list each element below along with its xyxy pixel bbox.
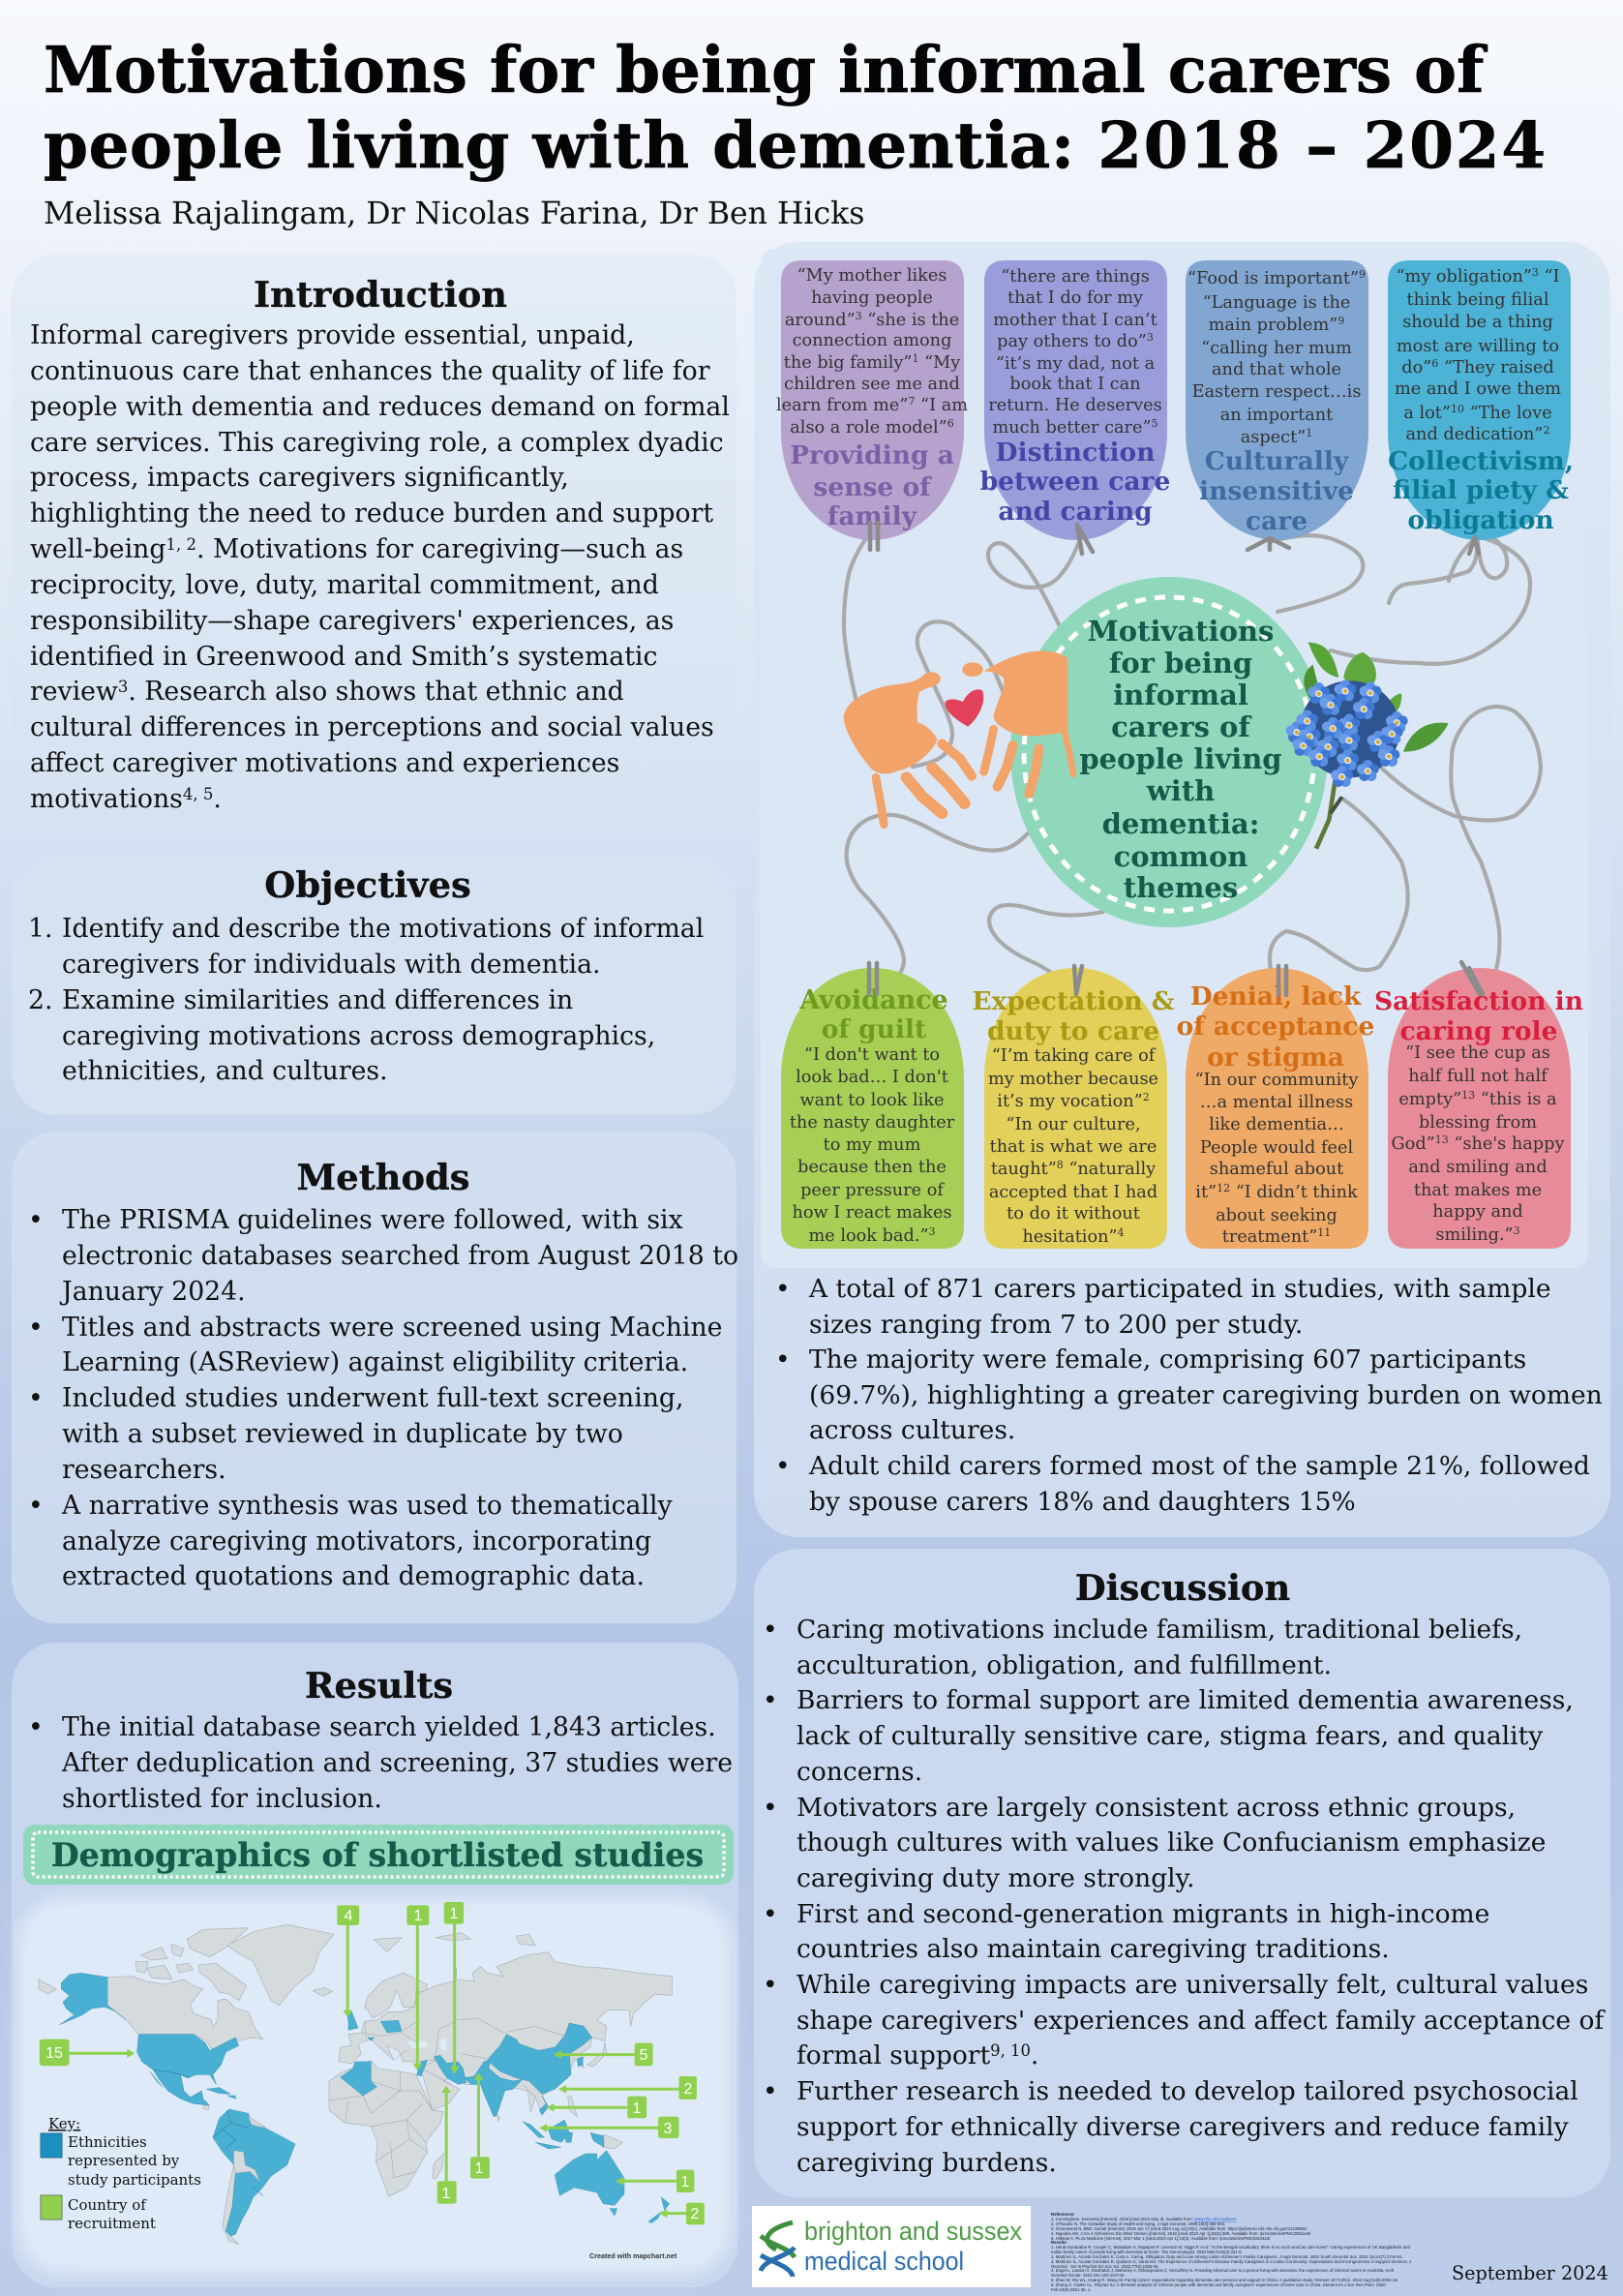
tag: denial, lack of acceptance or stigma: 12 bbox=[1217, 1182, 1230, 1194]
list: participant results bbox=[775, 1274, 1603, 1517]
tag: denial, lack of acceptance or stigma: about seeking bbox=[1216, 1206, 1337, 1225]
europe, africa, asia and oceania bbox=[329, 1933, 672, 2223]
list: methods: Titles and abstracts were screened using Machine bbox=[62, 1313, 722, 1343]
references: 2. Martinez IL, Acosta Gonzalez E, Cara A. Caring, Obligation, Duty and Love Among Latino Alzheimer's Family Caregivers. J Appl Gerontol. 2022 South Gerontol Soc. 2022 Jul;41(7):1744-51. bbox=[1051, 2254, 1403, 2259]
references: Indian family carers of people living with dementia at home. The Gerontologist. 2020 March;60(2):331-9. bbox=[1051, 2250, 1243, 2254]
panel: objectives bbox=[12, 857, 736, 1115]
tag: collectivism, filial piety and obligation: think being filial bbox=[1407, 290, 1549, 310]
list: objectives: 1. bbox=[28, 914, 52, 944]
list: objectives bbox=[28, 914, 704, 1086]
tag: avoidance of guilt: how I react makes bbox=[792, 1203, 952, 1223]
text: introduction: care services. This caregiving role, a complex dyadic bbox=[30, 428, 724, 458]
tag: collectivism, filial piety and obligation: obligation bbox=[1407, 505, 1554, 535]
panel: discussion bbox=[754, 1549, 1610, 2197]
text: introduction: Informal caregivers provide essential, unpaid, bbox=[30, 320, 635, 350]
list: discussion: acculturation, obligation, and fulfillment. bbox=[796, 1650, 1332, 1680]
tag: satisfaction in caring role: that makes me bbox=[1414, 1181, 1542, 1200]
heading: discussion: Discussion bbox=[1075, 1566, 1290, 1609]
references: 5. Hillman A. PLoS Medicine [Internet]. 2017 Mar 1 [cited 2022 Apr 1];14(3). Available from: /pmc/articles/PMC5319116/ bbox=[1051, 2236, 1271, 2241]
list: discussion: • bbox=[763, 1899, 778, 1929]
list: methods bbox=[28, 1205, 738, 1591]
tag: denial, lack of acceptance or stigma: shameful about bbox=[1210, 1160, 1343, 1179]
tag: providing a sense of family: family bbox=[827, 501, 918, 531]
central circle: motivations: carers of bbox=[1111, 710, 1252, 743]
list: results bbox=[28, 1712, 733, 1814]
tag: satisfaction in caring role bbox=[1374, 968, 1583, 1249]
list: discussion: Motivators are largely consistent across ethnic groups, bbox=[796, 1793, 1516, 1823]
text: introduction: affect caregiver motivations and experiences bbox=[30, 748, 619, 778]
references: 1. Cunningham. Dementia [Internet]. 2019 [cited 2021 May 3]. Available from: www.nhs.uk/conditions bbox=[1051, 2217, 1236, 2221]
americas bbox=[39, 1924, 334, 2244]
tag: collectivism, filial piety and obligation: “The love bbox=[1464, 404, 1552, 423]
central circle: motivations bbox=[1010, 577, 1328, 927]
list: methods: • bbox=[28, 1383, 44, 1413]
text: introduction: reciprocity, love, duty, marital commitment, and bbox=[30, 570, 659, 600]
tag: collectivism, filial piety and obligation: “my obligation” bbox=[1396, 267, 1532, 287]
tag: distinction between care and caring: that I do for my bbox=[1007, 288, 1143, 308]
tag: expectation and duty to care: hesitation” bbox=[1022, 1227, 1118, 1247]
tag: denial, lack of acceptance or stigma: “I didn’t think bbox=[1230, 1183, 1358, 1202]
tag: distinction between care and caring: and caring bbox=[998, 497, 1153, 527]
tag: satisfaction in caring role: caring role bbox=[1400, 1016, 1557, 1046]
list: participant results: Adult child carers formed most of the sample 21%, followed bbox=[809, 1451, 1590, 1481]
count labels: 1 bbox=[450, 1906, 459, 1922]
map key bbox=[41, 2115, 201, 2232]
text: introduction: motivations4, 5. bbox=[30, 784, 222, 814]
tag: expectation and duty to care: taught” bbox=[991, 1160, 1057, 1179]
tag: satisfaction in caring role: Satisfaction in bbox=[1374, 986, 1583, 1016]
icon: forget-me-not flowers bbox=[1286, 642, 1449, 849]
list: discussion bbox=[763, 1615, 1606, 2178]
tag: satisfaction in caring role: “this is a bbox=[1475, 1090, 1557, 1109]
tag: expectation and duty to care: my mother because bbox=[988, 1070, 1158, 1089]
tag: expectation and duty to care: 4 bbox=[1118, 1226, 1125, 1239]
tag: providing a sense of family: 3 bbox=[856, 310, 862, 322]
references: 4. Engel L, Lawton A, Dowhaluk J, Mahoney A, Mihalopoulos C, McCaffrey N. Providing informal care to a person living with dementia: the experiences of informal carers in Australia. Arch bbox=[1051, 2268, 1395, 2273]
central circle: motivations: with bbox=[1146, 774, 1215, 807]
tag: culturally insensitive care: 9 bbox=[1337, 315, 1344, 327]
list: discussion: Barriers to formal support are limited dementia awareness, bbox=[796, 1685, 1574, 1715]
tag: avoidance of guilt: peer pressure of bbox=[800, 1181, 945, 1200]
connecting strings bbox=[844, 528, 1541, 994]
tag: denial, lack of acceptance or stigma: like dementia… bbox=[1209, 1115, 1344, 1134]
authors: Melissa Rajalingam, Dr Nicolas Farina, Dr Ben Hicks bbox=[44, 196, 864, 231]
references: Feb;19(8):2821-35. 1. bbox=[1051, 2287, 1092, 2292]
list: participant results: (69.7%), highlighting a greater caregiving burden on women bbox=[809, 1380, 1603, 1410]
list: results: shortlisted for inclusion. bbox=[62, 1784, 382, 1814]
references: Results: bbox=[1051, 2240, 1068, 2245]
count labels: 1 bbox=[442, 2186, 451, 2202]
tag: distinction between care and caring: pay others to do” bbox=[997, 332, 1147, 351]
tag: expectation and duty to care: 2 bbox=[1143, 1091, 1150, 1103]
list: participant results: by spouse carers 18% and daughters 15% bbox=[809, 1487, 1356, 1517]
text: introduction: continuous care that enhances the quality of life for bbox=[30, 356, 709, 386]
tag: collectivism, filial piety and obligation: most are willing to bbox=[1397, 337, 1559, 356]
title: Motivations for being informal carers of bbox=[44, 32, 1484, 107]
count boxes bbox=[40, 1902, 705, 2224]
list: methods: analyze caregiving motivators, incorporating bbox=[62, 1526, 651, 1556]
map credit: Created with mapchart.net bbox=[589, 2251, 677, 2260]
list: objectives: caregiving motivations across demographics, bbox=[62, 1021, 655, 1051]
diagram: common themes bbox=[761, 249, 1588, 1268]
tag: satisfaction in caring role: 13 bbox=[1461, 1089, 1475, 1102]
panel: introduction bbox=[12, 255, 736, 837]
list: discussion: though cultures with values like Confucianism emphasize bbox=[796, 1828, 1546, 1858]
tag: culturally insensitive care bbox=[1186, 260, 1368, 540]
list: discussion: First and second-generation migrants in high-income bbox=[796, 1899, 1489, 1929]
tag: distinction between care and caring: mother that I can’t bbox=[993, 311, 1157, 330]
references: 2. O'Rourke N. The Canadian Study of Health and Aging. J Appl Gerontol. 1999;18(4):389-404. bbox=[1051, 2221, 1225, 2226]
tag: providing a sense of family: also a role model” bbox=[790, 418, 947, 438]
tag: providing a sense of family: around” bbox=[785, 311, 856, 330]
references: Gerontol Geriatr. 2023 Dec;102:104743. bbox=[1051, 2273, 1125, 2278]
text: introduction: identified in Greenwood and Smith’s systematic bbox=[30, 642, 657, 672]
text: introduction: people with dementia and reduces demand on formal bbox=[30, 392, 730, 422]
count labels: 2 bbox=[691, 2206, 700, 2222]
list: discussion: lack of culturally sensitive care, stigma fears, and quality bbox=[796, 1721, 1543, 1751]
tag: culturally insensitive care: “Language is the bbox=[1203, 293, 1350, 313]
text: introduction: review3. Research also shows that ethnic and bbox=[30, 677, 624, 707]
central circle: motivations: for being bbox=[1109, 647, 1252, 680]
arrows bbox=[70, 1924, 686, 2218]
tag: collectivism, filial piety and obligation: a lot” bbox=[1403, 404, 1451, 423]
tag: collectivism, filial piety and obligation: filial piety & bbox=[1393, 475, 1569, 505]
list: methods: The PRISMA guidelines were followed, with six bbox=[62, 1205, 683, 1235]
tag: culturally insensitive care: and that whole bbox=[1212, 360, 1341, 379]
tag: providing a sense of family: connection among bbox=[793, 331, 951, 350]
list: methods: electronic databases searched from August 2018 to bbox=[62, 1241, 738, 1271]
list: methods: researchers. bbox=[62, 1455, 226, 1485]
tag: collectivism, filial piety and obligation bbox=[1388, 260, 1574, 540]
panel: common themes and participant results bbox=[754, 242, 1610, 1537]
tag: collectivism, filial piety and obligation: should be a thing bbox=[1402, 313, 1553, 332]
tag: collectivism, filial piety and obligation: “I bbox=[1539, 267, 1560, 287]
tag: culturally insensitive care: main problem” bbox=[1209, 316, 1337, 335]
map key: recruitment bbox=[68, 2215, 156, 2232]
list: objectives: caregivers for individuals with dementia. bbox=[62, 950, 600, 980]
list: discussion: While caregiving impacts are universally felt, cultural values bbox=[796, 1970, 1588, 2000]
list: discussion: Caring motivations include familism, traditional beliefs, bbox=[796, 1615, 1522, 1645]
tag: satisfaction in caring role: smiling.” bbox=[1435, 1225, 1514, 1245]
list: objectives: 2. bbox=[28, 985, 52, 1015]
tag: distinction between care and caring: 3 bbox=[1147, 331, 1154, 344]
central circle: motivations: themes bbox=[1124, 871, 1238, 904]
text: introduction: process, impacts caregivers significantly, bbox=[30, 463, 569, 493]
tag: expectation and duty to care: duty to care bbox=[987, 1016, 1159, 1046]
tag: culturally insensitive care: an important bbox=[1220, 406, 1333, 425]
list: discussion: Further research is needed to develop tailored psychosocial bbox=[796, 2076, 1578, 2106]
tag: providing a sense of family: 7 bbox=[908, 395, 915, 408]
tag: culturally insensitive care: 1 bbox=[1306, 427, 1312, 439]
central circle: motivations: people living bbox=[1079, 742, 1282, 775]
tag: culturally insensitive care: Culturally bbox=[1205, 446, 1350, 476]
tag: avoidance of guilt: to my mum bbox=[824, 1135, 921, 1155]
heading: objectives: Objectives bbox=[264, 863, 471, 906]
tag: satisfaction in caring role: empty” bbox=[1398, 1090, 1461, 1109]
count labels: 1 bbox=[681, 2174, 690, 2190]
references: 6. Zhang X, Clarke CL, Rhynas SJ. A thematic analysis of Chinese people with dementia and family caregivers' experiences of home care in China. Dement Int J Soc Res Pract. 2020 bbox=[1051, 2282, 1386, 2287]
text: introduction: well-being1, 2. Motivations for caregiving—such as bbox=[30, 534, 683, 564]
tag: distinction between care and caring: Distinction bbox=[996, 438, 1155, 468]
tag: avoidance of guilt bbox=[781, 968, 964, 1249]
tag: expectation and duty to care: “I’m taking care of bbox=[992, 1046, 1157, 1066]
tag: distinction between care and caring: return. He deserves bbox=[988, 396, 1162, 415]
tag: expectation and duty to care bbox=[972, 968, 1175, 1249]
count labels bbox=[45, 1906, 700, 2222]
tag: expectation and duty to care: “In our culture, bbox=[1006, 1115, 1141, 1134]
tag: expectation and duty to care: “naturally bbox=[1064, 1160, 1156, 1179]
icon: orange handprints and heart bbox=[844, 650, 1073, 825]
tag: collectivism, filial piety and obligation: “They raised bbox=[1438, 358, 1554, 378]
map key: Country of bbox=[68, 2196, 147, 2214]
banner: demographics of shortlisted studies: Demographics of shortlisted studies bbox=[51, 1836, 704, 1874]
tag: collectivism, filial piety and obligation: 10 bbox=[1451, 403, 1464, 415]
banner: demographics of shortlisted studies bbox=[23, 1825, 734, 1885]
tag: providing a sense of family: the big family” bbox=[784, 353, 912, 373]
references: 4. Napoles AM, J Am J Alzheimers Dis Other Demen [Internet]. 2018 [cited 2022 Apr 1];25(5):389. Available from: /pmc/articles/PMC2951146/ bbox=[1051, 2231, 1311, 2236]
tag: culturally insensitive care: 9 bbox=[1359, 268, 1366, 281]
tag: denial, lack of acceptance or stigma: or stigma bbox=[1207, 1042, 1344, 1072]
tag: providing a sense of family: “she is the bbox=[862, 311, 959, 330]
tag: collectivism, filial piety and obligation: and dedication” bbox=[1406, 425, 1543, 444]
central circle: motivations: common bbox=[1114, 840, 1247, 873]
tag: expectation and duty to care: it’s my vocation” bbox=[997, 1092, 1143, 1111]
tag: collectivism, filial piety and obligation: Collectivism, bbox=[1388, 446, 1574, 476]
tag: distinction between care and caring: book that I can bbox=[1009, 375, 1141, 394]
list: participant results: A total of 871 carers participated in studies, with sample bbox=[809, 1274, 1551, 1304]
text: introduction: cultural differences in perceptions and social values bbox=[30, 712, 714, 742]
list: results: The initial database search yielded 1,843 articles. bbox=[62, 1712, 716, 1742]
list: methods: • bbox=[28, 1205, 44, 1235]
map key: Ethnicities bbox=[68, 2133, 147, 2151]
date: September 2024 bbox=[1452, 2262, 1608, 2284]
references: 5. Zhao W, Wu WL, Huang R, Wang W. Family carers' expectations regarding dementia care services and support in China: A qualitative study. Dement 19:713012. 2022 Aug;21(6):2004-19. bbox=[1051, 2278, 1398, 2282]
heading: methods: Methods bbox=[297, 1156, 469, 1198]
central circle: motivations: dementia: bbox=[1102, 807, 1259, 840]
list: objectives: ethnicities, and cultures. bbox=[62, 1056, 388, 1086]
tag: culturally insensitive care: aspect” bbox=[1241, 428, 1306, 447]
tag: expectation and duty to care: Expectation & bbox=[972, 986, 1175, 1016]
tag: denial, lack of acceptance or stigma: treatment” bbox=[1222, 1227, 1317, 1247]
list: methods: A narrative synthesis was used to thematically bbox=[62, 1491, 673, 1521]
tag: avoidance of guilt: of guilt bbox=[822, 1014, 927, 1044]
tag: avoidance of guilt: me look bad.” bbox=[808, 1226, 929, 1246]
tag: providing a sense of family: 1 bbox=[912, 352, 918, 365]
tag: providing a sense of family: “My bbox=[918, 353, 960, 373]
list: methods: Learning (ASReview) against eligibility criteria. bbox=[62, 1347, 688, 1377]
tag: providing a sense of family: children see me and bbox=[784, 375, 960, 394]
tag: avoidance of guilt: because then the bbox=[797, 1158, 947, 1177]
logo: brighton and sussex medical school: medical school bbox=[804, 2247, 964, 2276]
list: results: • bbox=[28, 1712, 44, 1742]
list: discussion: shape caregivers' experiences and affect family acceptance of bbox=[796, 2006, 1604, 2036]
tag: satisfaction in caring role: 13 bbox=[1435, 1133, 1449, 1146]
count labels: 4 bbox=[345, 1908, 353, 1924]
count labels: 1 bbox=[633, 2100, 642, 2117]
list: discussion: caregiving burdens. bbox=[796, 2148, 1057, 2178]
tag: expectation and duty to care: to do it without bbox=[1007, 1204, 1140, 1224]
list: participant results: • bbox=[775, 1274, 791, 1304]
tag: providing a sense of family: “My mother likes bbox=[797, 266, 947, 286]
references: 1. Herat-Gunaratne R, Cooper C, Mukadam N, Rapaport P, Leverton M, Higgs P, et al. "In the Bengali vocabulary, there is no such word as care home": Caring experiences of UK Bangladeshi and bbox=[1051, 2245, 1410, 2250]
list: discussion: • bbox=[763, 2076, 778, 2106]
count labels: 2 bbox=[684, 2081, 693, 2098]
list: methods: • bbox=[28, 1491, 44, 1521]
list: participant results: across cultures. bbox=[809, 1415, 1015, 1445]
logo: brighton and sussex medical school: brighton and sussex bbox=[804, 2217, 1022, 2246]
count labels: 15 bbox=[45, 2045, 63, 2062]
tag: satisfaction in caring role: God” bbox=[1392, 1134, 1435, 1154]
text: introduction bbox=[30, 320, 730, 814]
panel: results bbox=[12, 1643, 738, 2287]
panel: methods bbox=[12, 1132, 736, 1623]
tag: distinction between care and caring: “it’s my dad, not a bbox=[996, 354, 1156, 374]
text: introduction: responsibility—shape caregivers' experiences, as bbox=[30, 606, 674, 636]
count labels: 1 bbox=[414, 1908, 423, 1924]
tag: denial, lack of acceptance or stigma: 11 bbox=[1317, 1226, 1331, 1239]
references: References: bbox=[1051, 2212, 1075, 2217]
central circle: motivations: Motivations bbox=[1088, 615, 1274, 648]
list: methods: January 2024. bbox=[62, 1277, 246, 1307]
list: discussion: concerns. bbox=[796, 1757, 922, 1787]
tag: denial, lack of acceptance or stigma: of acceptance bbox=[1177, 1012, 1374, 1042]
tag: providing a sense of family: having people bbox=[811, 288, 933, 308]
tag: satisfaction in caring role: blessing from bbox=[1419, 1113, 1537, 1133]
tag: denial, lack of acceptance or stigma: Denial, lack bbox=[1190, 982, 1362, 1012]
list: methods: • bbox=[28, 1313, 44, 1343]
list: discussion: caregiving duty more strongly. bbox=[796, 1863, 1195, 1893]
tag: culturally insensitive care: “calling her mum bbox=[1201, 339, 1352, 358]
list: participant results: • bbox=[775, 1451, 791, 1481]
tag: avoidance of guilt: “I don't want to bbox=[804, 1045, 940, 1065]
list: methods: with a subset reviewed in duplicate by two bbox=[62, 1419, 623, 1449]
tag: expectation and duty to care: 8 bbox=[1057, 1159, 1064, 1171]
logo: brighton and sussex medical school bbox=[752, 2206, 1031, 2287]
list: methods: extracted quotations and demographic data. bbox=[62, 1561, 645, 1591]
tag: satisfaction in caring role: 3 bbox=[1514, 1224, 1520, 1237]
list: results: After deduplication and screening, 37 studies were bbox=[62, 1748, 733, 1778]
tag: collectivism, filial piety and obligation: 2 bbox=[1543, 424, 1549, 437]
tag: distinction between care and caring: much better care” bbox=[992, 418, 1152, 438]
tag: collectivism, filial piety and obligation: me and I owe them bbox=[1395, 379, 1561, 399]
tag: providing a sense of family: learn from me” bbox=[776, 396, 908, 415]
list: discussion: formal support9, 10. bbox=[796, 2040, 1038, 2070]
heading: introduction: Introduction bbox=[254, 273, 507, 316]
list: objectives: Examine similarities and differences in bbox=[62, 985, 573, 1015]
tag: culturally insensitive care: “Food is important” bbox=[1187, 269, 1359, 288]
heading: results: Results bbox=[305, 1664, 453, 1707]
tag: denial, lack of acceptance or stigma: …a mental illness bbox=[1200, 1093, 1353, 1112]
references: 3. Greenwood N, BMC Geriatr [Internet]. 2019 Jan 17 [cited 2023 Aug 12];19(1). Available from: https://pubmed.ncbi.nlm.nih.gov/31109381/ bbox=[1051, 2226, 1307, 2231]
count labels: 5 bbox=[640, 2047, 648, 2064]
list: methods: Included studies underwent full-text screening, bbox=[62, 1383, 683, 1413]
world map with study recruitment counts bbox=[15, 1895, 734, 2277]
map key: study participants bbox=[68, 2171, 201, 2189]
tag: satisfaction in caring role: half full not half bbox=[1408, 1067, 1548, 1086]
tag: denial, lack of acceptance or stigma: it” bbox=[1195, 1183, 1217, 1202]
count labels: 3 bbox=[664, 2121, 673, 2137]
tag: distinction between care and caring: 5 bbox=[1152, 417, 1158, 430]
tag: satisfaction in caring role: “she's happy bbox=[1449, 1134, 1564, 1154]
list: discussion: • bbox=[763, 1970, 778, 2000]
tag: collectivism, filial piety and obligation: do” bbox=[1401, 358, 1431, 378]
tag: avoidance of guilt: 3 bbox=[929, 1225, 936, 1238]
tag: distinction between care and caring: between care bbox=[980, 467, 1170, 497]
list: discussion: • bbox=[763, 1793, 778, 1823]
tag: distinction between care and caring: “there are things bbox=[1001, 267, 1150, 287]
tag: satisfaction in caring role: happy and bbox=[1432, 1202, 1523, 1222]
list: participant results: sizes ranging from 7 to 200 per study. bbox=[809, 1310, 1303, 1340]
tag: culturally insensitive care: care bbox=[1246, 506, 1307, 536]
tag: satisfaction in caring role: “I see the cup as bbox=[1405, 1043, 1550, 1063]
references bbox=[1051, 2212, 1411, 2292]
tag: expectation and duty to care: that is what we are bbox=[990, 1137, 1157, 1157]
string clips bbox=[869, 523, 1483, 995]
tag: denial, lack of acceptance or stigma: People would feel bbox=[1200, 1138, 1353, 1158]
tag: providing a sense of family: 6 bbox=[947, 417, 954, 430]
tag: avoidance of guilt: Avoidance bbox=[798, 985, 948, 1015]
list: discussion: • bbox=[763, 1685, 778, 1715]
tag: denial, lack of acceptance or stigma: “In our community bbox=[1195, 1071, 1358, 1090]
tag: culturally insensitive care: insensitive bbox=[1199, 476, 1354, 506]
tag: providing a sense of family: sense of bbox=[813, 472, 932, 502]
tag: culturally insensitive care: Eastern respect…is bbox=[1192, 382, 1361, 402]
list: discussion: countries also maintain caregiving traditions. bbox=[796, 1934, 1390, 1964]
title bbox=[44, 32, 1548, 183]
tag: distinction between care and caring bbox=[980, 260, 1170, 540]
tag: avoidance of guilt: look bad… I don't bbox=[796, 1068, 948, 1087]
tag: avoidance of guilt: the nasty daughter bbox=[790, 1113, 955, 1133]
list: objectives: Identify and describe the motivations of informal bbox=[62, 914, 704, 944]
tag: providing a sense of family: “I am bbox=[915, 396, 968, 415]
list: discussion: • bbox=[763, 1615, 778, 1645]
tag: collectivism, filial piety and obligation: 3 bbox=[1532, 266, 1539, 279]
text: introduction: highlighting the need to reduce burden and support bbox=[30, 498, 713, 529]
central circle: motivations: informal bbox=[1113, 679, 1248, 711]
tag: avoidance of guilt: want to look like bbox=[800, 1091, 944, 1110]
tag: expectation and duty to care: accepted that I had bbox=[989, 1183, 1157, 1202]
list: participant results: The majority were female, comprising 607 participants bbox=[809, 1344, 1526, 1375]
map key: Key: bbox=[48, 2115, 80, 2132]
count labels: 1 bbox=[475, 2160, 484, 2177]
map key: represented by bbox=[68, 2152, 180, 2169]
tag: providing a sense of family: Providing a bbox=[790, 440, 954, 470]
tag: collectivism, filial piety and obligation: 6 bbox=[1431, 357, 1438, 370]
title: people living with dementia: 2018 – 2024 bbox=[44, 107, 1548, 183]
list: participant results: • bbox=[775, 1344, 791, 1375]
tag: satisfaction in caring role: and smiling and bbox=[1408, 1158, 1548, 1177]
references: Gerontol - Ser B Psychol Sci Soc Sci. 2022;77(6):1083-93. bbox=[1051, 2264, 1159, 2269]
references: 3. Martinez IL, Acosta Gonzalez E, Quintero C, Vania MJ. The Experience of Alzheimer's Disease Family Caregivers in a Latino Community: Expectations and Incongruences in Support Services. J bbox=[1051, 2259, 1411, 2264]
tag: providing a sense of family bbox=[776, 260, 968, 540]
list: discussion: support for ethnically diverse caregivers and reduce family bbox=[796, 2112, 1569, 2142]
tag: denial, lack of acceptance or stigma bbox=[1177, 968, 1374, 1249]
